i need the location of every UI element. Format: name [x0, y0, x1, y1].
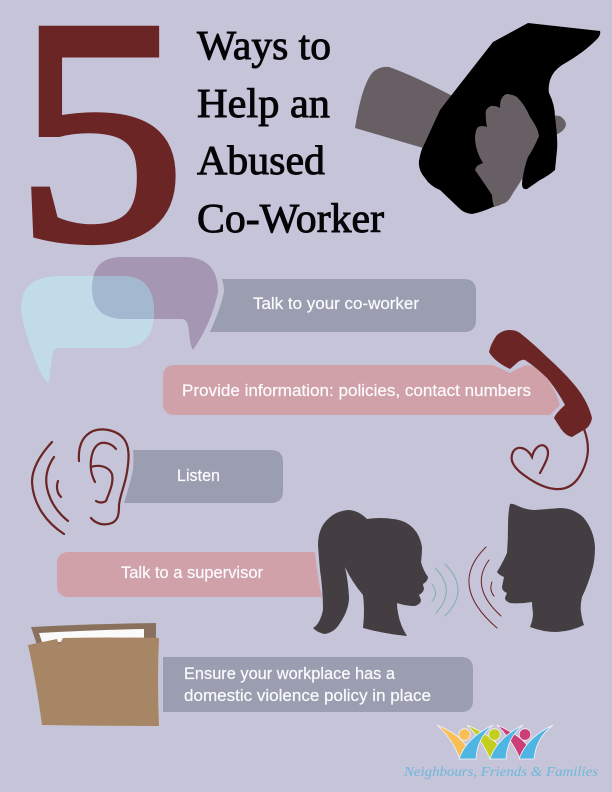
speech bubbles: [21, 257, 218, 383]
icon: ear with sound waves: [32, 429, 129, 534]
bar: talk to a supervisor: Talk to a supervisor: [121, 564, 263, 582]
title: Co-Worker: [197, 195, 384, 241]
bar: provide information: Provide information: policies, contact numbers: [182, 382, 531, 400]
bar: talk to your co-worker: Talk to your co-worker: [253, 295, 420, 313]
bar: listen: [124, 450, 283, 503]
icon: folder: [28, 623, 159, 726]
logo: Neighbours, Friends & Families: Neighbours, Friends & Families: [403, 765, 599, 780]
title: [197, 22, 384, 241]
logo: Neighbours, Friends & Families: [403, 725, 599, 780]
icon: hand gripping arm: [355, 23, 600, 214]
icon: speech waves teal: [432, 564, 458, 616]
icon: woman head silhouette: [313, 510, 428, 636]
title: Help an: [197, 80, 330, 126]
icon: speech waves red: [469, 547, 501, 628]
bar: talk to your co-worker: [210, 279, 476, 332]
bar: talk to a supervisor: [57, 552, 322, 597]
icon: telephone handset with heart cord: [489, 330, 592, 489]
bar: ensure policy: domestic violence policy in place: [184, 687, 431, 705]
bar: provide information: [163, 365, 560, 415]
bar: ensure policy: Ensure your workplace has a: [184, 665, 396, 683]
title: Ways to: [197, 22, 331, 68]
title: Abused: [197, 137, 325, 183]
bar: ensure policy: [163, 657, 473, 712]
bar: listen: Listen: [177, 467, 220, 485]
icon: man head silhouette: [497, 504, 595, 632]
